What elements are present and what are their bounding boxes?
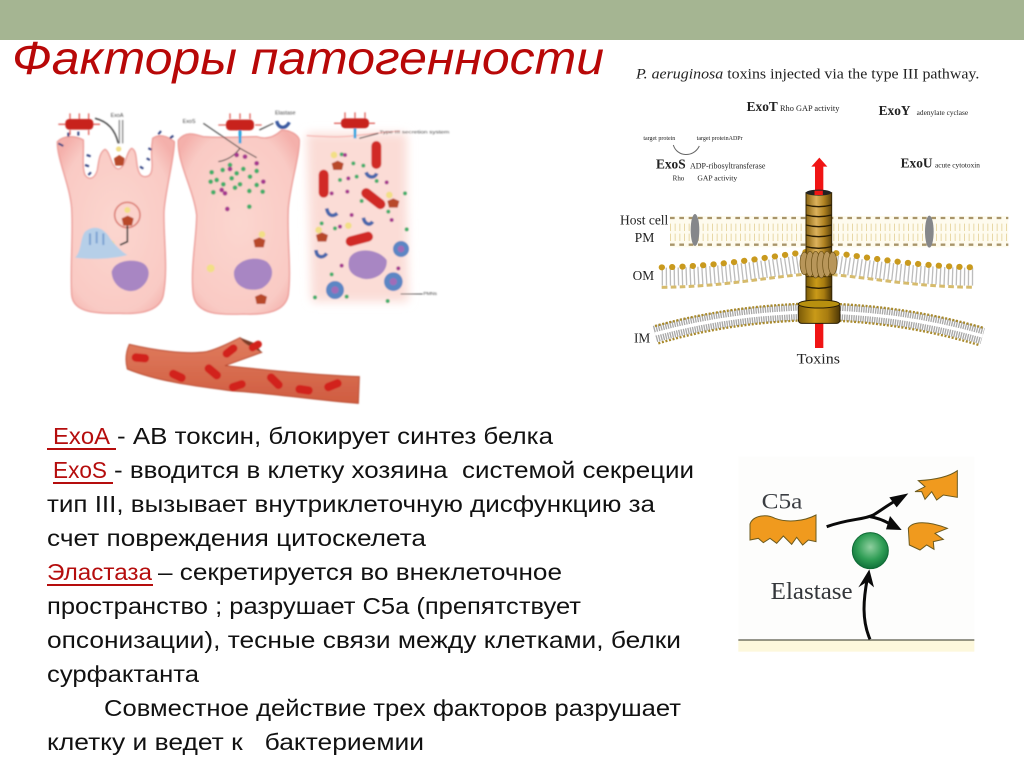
cell 2: ExoS and elastase: Elastase [275,110,295,116]
membrane labels: Toxins [797,351,840,367]
membrane labels: PM [635,230,654,245]
text block: virulence factors description: клетку и ведет к бактериемии [47,729,424,755]
cell 2: ExoS and elastase: ExoS [183,119,196,125]
toxin labels: ExoY [879,103,911,118]
toxin labels: GAP activity [697,174,737,183]
toxin arrows [811,158,827,348]
panel: infection of epithelial cells illustration [57,110,449,403]
toxin labels [643,99,980,183]
cell 3: destroyed cell: PMNs [423,291,437,297]
host cell membrane [670,214,1008,248]
top banner [0,0,1024,40]
text block: virulence factors description: Совместное действие трех факторов разрушает [104,695,681,721]
blood vessel [126,338,359,403]
text block: virulence factors description: Эластаза [47,559,153,585]
membrane labels: IM [634,331,650,346]
title: Факторы патогенности [12,32,604,84]
cell 3: destroyed cell: Type III secretion system [379,130,449,136]
text block: virulence factors description: пространство ; разрушает С5а (препятствует [47,593,581,619]
C5a fragment [750,488,816,545]
toxin labels: ExoS [656,157,686,172]
elastase label: Elastase [771,579,853,605]
text block: virulence factors description: – секретируется во внеклеточное [158,559,562,585]
C5a fragment: C5a [762,488,802,513]
membrane labels: OM [633,268,654,283]
cleaved fragments [908,471,957,550]
cell 3: destroyed cell [307,128,449,303]
cell 1: ExoA [57,113,174,314]
panel: P. aeruginosa type III secretion diagram [620,66,1008,367]
text block: virulence factors description: тип III, вызывает внутриклеточную дисфункцию за [47,491,656,517]
diagram heading: P. aeruginosa toxins injected via the type III pathway. [635,66,979,82]
toxin labels: ADP-ribosyltransferase [690,162,766,171]
toxin labels: target protein [643,136,675,142]
cell 2: ExoS and elastase [178,110,299,314]
membrane labels [620,212,840,367]
bacteria [58,112,375,135]
text block: virulence factors description: ExoA [53,423,110,449]
text block: virulence factors description: - вводится в клетку хозяина системой секреции [114,457,694,483]
toxin labels: Rho [673,175,685,183]
text block: virulence factors description: - АВ токсин, блокирует синтез белка [117,423,554,449]
text block: virulence factors description: ExoS [53,457,107,483]
toxin labels: ExoU [901,155,933,170]
text block: virulence factors description: счет повреждения цитоскелета [47,525,427,551]
toxin labels: adenylate cyclase [917,108,968,117]
elastase arrow [858,569,874,639]
text block: virulence factors description: опсонизации), тесные связи между клетками, белки [47,627,681,653]
elastase molecule [852,533,888,569]
panel: C5a elastase diagram [738,457,974,652]
cleavage arrows [827,493,908,530]
text block: virulence factors description: сурфактанта [47,661,200,687]
cell 1: ExoA: ExoA [111,113,124,119]
injection needle [798,190,840,323]
toxin labels: acute cytotoxin [935,160,980,169]
toxin labels: Rho GAP activity [780,104,840,113]
outer membrane [662,251,975,287]
inner membrane [655,303,983,345]
toxin labels: ExoT [747,99,778,114]
toxin labels: target proteinADPr [697,136,743,142]
text block: virulence factors description [47,423,694,755]
membrane labels: Host cell [620,212,669,227]
cell surface [738,640,974,652]
